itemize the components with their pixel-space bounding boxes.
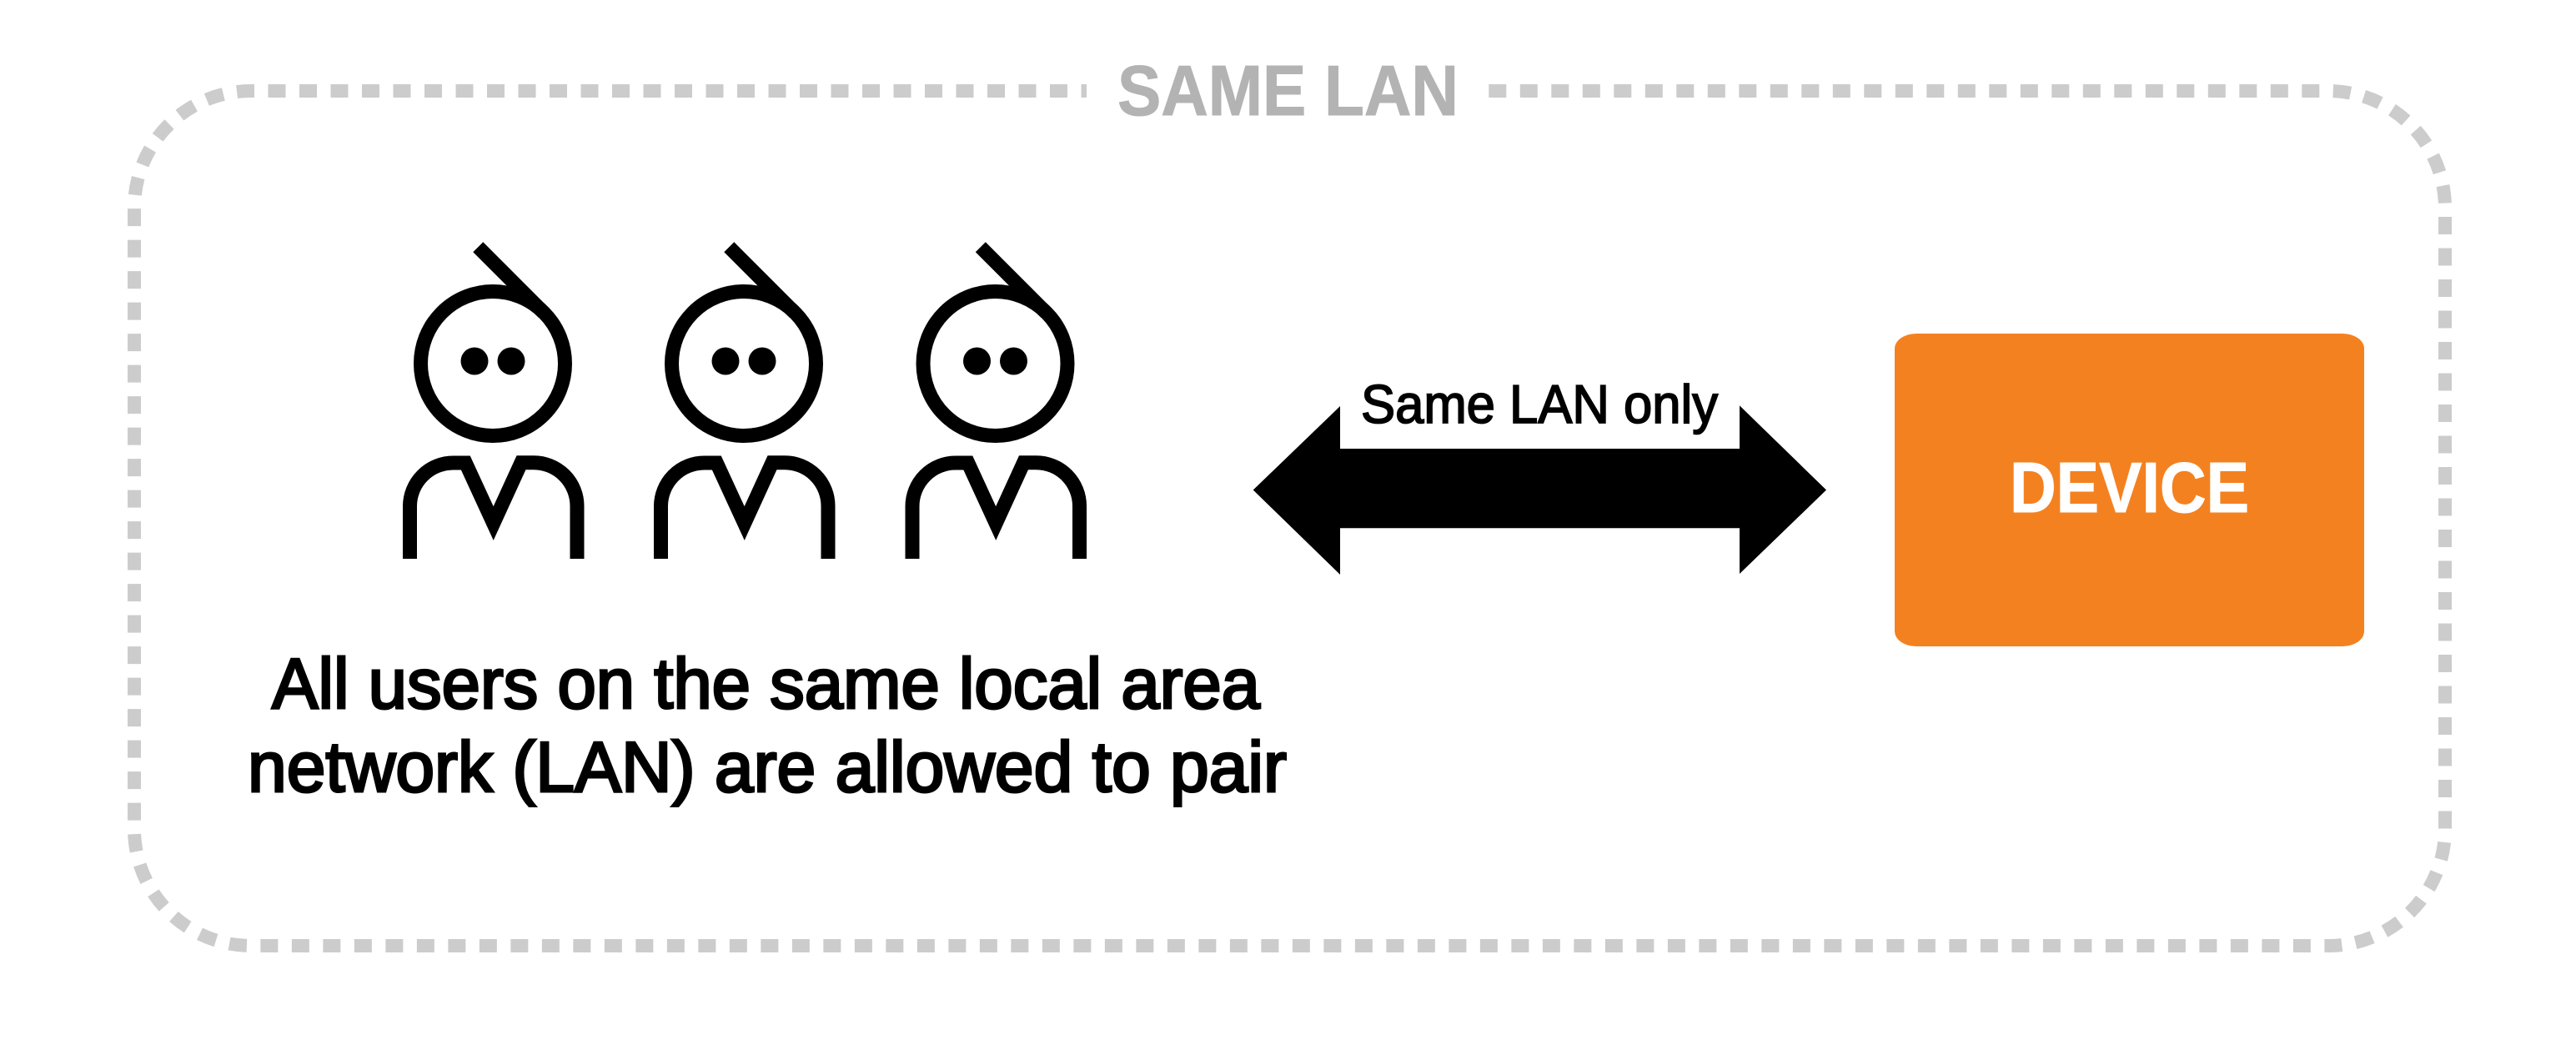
device box [1895,334,2364,646]
icon: user 2 [660,247,828,559]
text block: pairing description: All users on the same local area [272,645,1261,724]
arrow: two-way connection [1253,405,1826,575]
arrow label: Same LAN only: Same LAN only [1361,374,1718,435]
text block: pairing description [248,645,1287,807]
icon group: three users [410,247,1079,559]
icon: user 3 [912,247,1079,559]
device label: DEVICE [2010,449,2249,528]
text block: pairing description: network (LAN) are allowed to pair [248,728,1287,807]
panel: device [1895,334,2364,646]
panel: dashed LAN boundary [134,91,2445,946]
heading: SAME LAN: SAME LAN [1117,52,1459,131]
icon: user 1 [410,247,577,559]
